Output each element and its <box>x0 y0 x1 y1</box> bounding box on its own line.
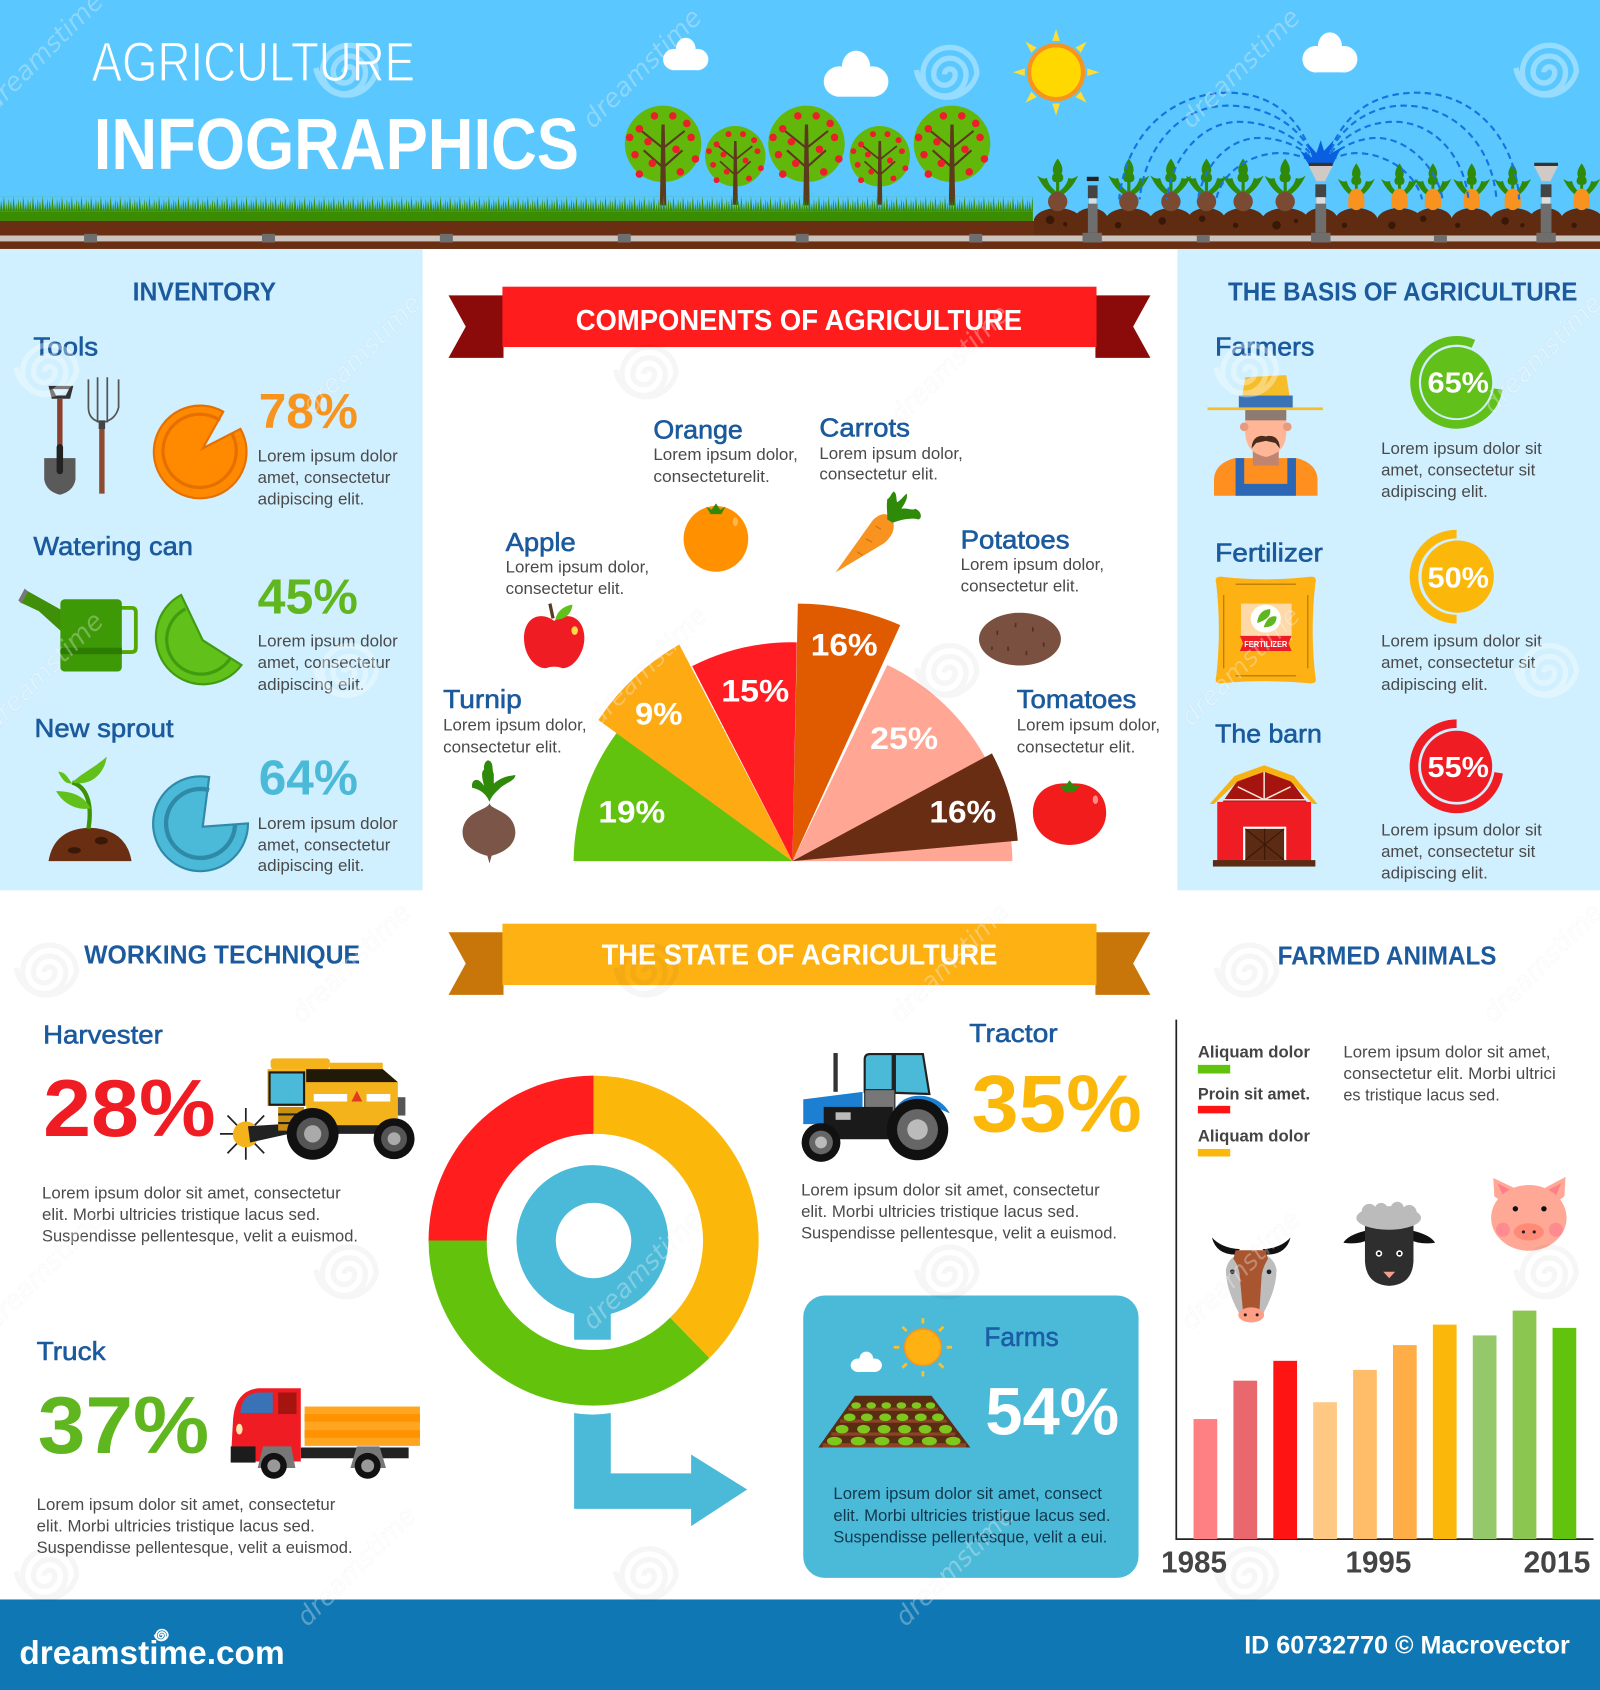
heading: inventory: INVENTORY <box>133 279 276 307</box>
chart: bars <box>1194 1311 1576 1539</box>
value: 28 percent: 28% <box>43 1064 216 1154</box>
text: farmers description: amet, consectetur sit <box>1381 460 1536 479</box>
icon: footer spiral <box>155 1630 168 1641</box>
text: farms description: Suspendisse pellentesque, velit a eui. <box>833 1527 1107 1546</box>
icon: short sprinkler <box>1082 177 1102 243</box>
text: new sprout description: amet, consectetur <box>258 835 391 854</box>
text: harvester description <box>42 1184 358 1246</box>
text: harvester description: Lorem ipsum dolor sit amet, consectetur <box>42 1184 341 1203</box>
soil mounds <box>1034 208 1600 235</box>
panel: basis of agriculture <box>1177 249 1600 890</box>
icon: fertilizer bag: FERTILIZER <box>1244 640 1287 649</box>
text: watering can description: Lorem ipsum dolor <box>258 632 398 651</box>
ring: 50 percent <box>1414 534 1494 619</box>
text: fertilizer description: amet, consectetur sit <box>1381 653 1536 672</box>
text: farmers description: Lorem ipsum dolor sit <box>1381 439 1542 458</box>
text: tractor description: Suspendisse pellentesque, velit a euismod. <box>801 1223 1117 1242</box>
text: barn description: amet, consectetur sit <box>1381 842 1536 861</box>
text: harvester description: elit. Morbi ultricies tristique lacus sed. <box>42 1205 320 1224</box>
watermark text: dreamstime <box>884 299 1015 431</box>
label: carrots: Carrots <box>819 415 910 443</box>
label: truck: Truck <box>37 1338 106 1366</box>
ribbon: components heading: COMPONENTS OF AGRICULTURE <box>576 305 1022 337</box>
watermark text: dreamstime <box>582 601 714 732</box>
title: agriculture: AGRICULTURE <box>92 30 415 93</box>
label: turnip: consectetur elit. <box>443 737 562 756</box>
watermark text: dreamstime <box>1175 3 1307 134</box>
watermark text: dreamstime <box>577 3 708 134</box>
sprinkler water arcs <box>1119 93 1519 199</box>
chart axes <box>1176 1020 1594 1539</box>
text: barn description <box>1381 820 1542 882</box>
chart: year labels: 1985 <box>1161 1547 1227 1580</box>
text: farms description: Lorem ipsum dolor sit amet, consect <box>833 1484 1102 1503</box>
label: potatoes: Potatoes <box>961 527 1070 555</box>
text: farms description: elit. Morbi ultricies tristique lacus sed. <box>833 1506 1111 1525</box>
icon: cow <box>1212 1237 1291 1322</box>
chart: year labels: 2015 <box>1523 1547 1590 1580</box>
label: apple: consectetur elit. <box>506 579 624 598</box>
icon: fertilizer bag <box>1216 577 1316 683</box>
value: 37 percent: 37% <box>38 1381 209 1471</box>
text: tools description <box>258 446 398 508</box>
text: truck description: Lorem ipsum dolor sit amet, consectetur <box>37 1495 336 1514</box>
icon: central blue ring with stem <box>516 1165 668 1340</box>
pie: 78 percent <box>154 406 247 498</box>
ring: 65 percent <box>1415 340 1498 424</box>
text: truck description: Suspendisse pellentesque, velit a euismod. <box>37 1538 353 1557</box>
chart: fan pie <box>574 604 1018 861</box>
legend: Proin sit amet. <box>1198 1084 1310 1103</box>
ring: 55 percent <box>1414 724 1499 809</box>
watermark text: dreamstime <box>286 897 417 1029</box>
text: farmers description: adipiscing elit. <box>1381 482 1488 501</box>
label: tomatoes <box>1017 686 1160 756</box>
icon: carrot <box>836 491 921 572</box>
label: harvester: Harvester <box>43 1021 163 1049</box>
label: tomatoes: Lorem ipsum dolor, <box>1017 716 1160 735</box>
chart: fan pie: 16% <box>929 794 996 829</box>
text: farms description <box>833 1484 1111 1546</box>
icon: turnip <box>463 760 515 863</box>
value: 35 percent: 35% <box>971 1060 1142 1150</box>
label: apple: Apple <box>506 529 576 557</box>
text: tools description: amet, consectetur <box>258 468 391 487</box>
ribbon: state heading: THE STATE OF AGRICULTURE <box>602 940 997 972</box>
panel: components of agriculture <box>443 287 1160 863</box>
label: potatoes <box>961 527 1104 596</box>
heading: working technique: WORKING TECHNIQUE <box>84 942 360 970</box>
text: animals description <box>1343 1042 1556 1104</box>
text: new sprout description: adipiscing elit. <box>258 856 364 875</box>
ring: 65 percent: 65% <box>1427 367 1489 399</box>
icon: turnip and carrot rows <box>1037 158 1600 211</box>
icon: tractor <box>802 1053 950 1162</box>
watermark text: dreamstime <box>889 1501 1021 1632</box>
icon: apple <box>524 603 584 668</box>
text: truck description: elit. Morbi ultricies tristique lacus sed. <box>37 1517 315 1536</box>
legend: Aliquam dolor <box>1198 1126 1310 1145</box>
ribbon: state heading <box>449 924 1150 995</box>
panel: header scene <box>0 0 1600 249</box>
icon: watering can <box>18 588 136 671</box>
panel: inventory <box>0 249 423 890</box>
label: farms: Farms <box>984 1322 1059 1352</box>
text: truck description <box>37 1495 353 1557</box>
value: 78 percent: 78% <box>259 383 358 439</box>
icon: small cloud <box>851 1352 882 1372</box>
label: tools: Tools <box>33 334 98 362</box>
pie: 45 percent <box>156 595 242 684</box>
ring: 50 percent: 50% <box>1427 562 1489 594</box>
icon: sun <box>1013 29 1099 115</box>
ring: 55 percent: 55% <box>1427 752 1489 784</box>
panel: farmed animals <box>1161 943 1594 1580</box>
watermark text: dreamstime <box>296 288 428 420</box>
watermark text: dreamstime <box>291 1501 422 1632</box>
text: tools description: Lorem ipsum dolor <box>258 446 398 465</box>
icon: truck <box>231 1388 420 1479</box>
label: new sprout: New sprout <box>35 715 174 743</box>
text: fertilizer description: adipiscing elit. <box>1381 675 1488 694</box>
text: harvester description: Suspendisse pellentesque, velit a euismod. <box>42 1227 358 1246</box>
icon: active sprinkler <box>1300 140 1341 243</box>
panel: working technique <box>37 942 420 1557</box>
legend: Aliquam dolor <box>1198 1042 1310 1061</box>
ground and buried pipe <box>0 221 1600 249</box>
icon: apple trees <box>625 106 990 205</box>
watermark text: dreamstime <box>1175 601 1307 732</box>
text: tools description: adipiscing elit. <box>258 489 364 508</box>
label: potatoes: Lorem ipsum dolor, <box>961 555 1104 574</box>
label: potatoes: consectetur elit. <box>961 577 1079 596</box>
watermark text: dreamstime <box>577 1205 708 1336</box>
text: watering can description: adipiscing elit. <box>258 675 364 694</box>
icon: fork <box>88 377 119 494</box>
label: orange: Orange <box>653 417 743 445</box>
text: animals description: consectetur elit. Morbi ultrici <box>1343 1064 1556 1083</box>
chart: donut <box>429 1076 759 1406</box>
label: apple <box>506 529 649 598</box>
card: farms <box>803 1296 1139 1578</box>
text: fertilizer description: Lorem ipsum dolor sit <box>1381 632 1542 651</box>
label: tomatoes: Tomatoes <box>1017 686 1136 714</box>
label: tractor: Tractor <box>969 1020 1058 1048</box>
value: 45 percent: 45% <box>258 568 358 624</box>
pie: 64 percent <box>153 776 248 871</box>
panel: state of agriculture <box>429 924 1150 1578</box>
icon: tomato <box>1033 780 1106 845</box>
label: the barn: The barn <box>1215 721 1322 749</box>
arrow: blue bent arrow <box>574 1413 747 1526</box>
icon: clouds <box>663 32 1357 97</box>
watermark text: dreamstime <box>884 897 1015 1029</box>
icon: spade <box>44 386 75 495</box>
title: infographics: INFOGRAPHICS <box>94 105 579 185</box>
heading: basis of agriculture: THE BASIS OF AGRICULTURE <box>1228 279 1577 307</box>
value: 54 percent: 54% <box>985 1376 1119 1450</box>
grass strip <box>0 196 1033 221</box>
heading: farmed animals: FARMED ANIMALS <box>1278 943 1496 971</box>
footer bar <box>0 1599 1600 1690</box>
label: watering can: Watering can <box>33 533 193 561</box>
icon: sheep <box>1343 1202 1435 1286</box>
chart: fan pie: 15% <box>721 674 789 709</box>
text: barn description: adipiscing elit. <box>1381 863 1488 882</box>
label: carrots: consectetur elit. <box>819 465 938 484</box>
text: animals description: Lorem ipsum dolor sit amet, <box>1343 1042 1550 1061</box>
chart: fan pie: 25% <box>870 721 938 756</box>
icon: pig <box>1491 1177 1567 1251</box>
text: farmers description <box>1381 439 1542 501</box>
text: tractor description <box>801 1180 1117 1242</box>
text: watering can description: amet, consectetur <box>258 653 391 672</box>
text: barn description: Lorem ipsum dolor sit <box>1381 820 1542 839</box>
icon: potato <box>979 613 1061 666</box>
label: orange <box>653 417 798 486</box>
text: watering can description <box>258 632 398 694</box>
label: farmers: Farmers <box>1215 334 1314 362</box>
watermark text: dreamstime <box>1175 1205 1307 1336</box>
footer credit: ID 60732770 © Macrovector <box>1244 1632 1570 1659</box>
icon: farmer <box>1208 375 1323 496</box>
label: orange: Lorem ipsum dolor, <box>653 445 798 464</box>
chart: fan pie: 9% <box>635 696 682 731</box>
label: apple: Lorem ipsum dolor, <box>506 557 649 576</box>
label: turnip <box>443 686 587 756</box>
label: turnip: Lorem ipsum dolor, <box>443 716 587 735</box>
text: new sprout description: Lorem ipsum dolor <box>258 814 398 833</box>
ribbon: components heading <box>449 287 1150 358</box>
text: new sprout description <box>258 814 398 875</box>
icon: harvester <box>220 1058 415 1160</box>
label: turnip: Turnip <box>443 686 522 714</box>
icon: sprout <box>49 757 132 861</box>
label: carrots <box>819 415 963 484</box>
chart: fan pie: 16% <box>811 627 878 662</box>
icon: orange <box>684 503 748 572</box>
legend <box>1198 1042 1310 1156</box>
chart: fan pie: 19% <box>598 794 665 829</box>
icon: barn <box>1210 765 1318 867</box>
text: tractor description: Lorem ipsum dolor sit amet, consectetur <box>801 1180 1100 1199</box>
text: fertilizer description <box>1381 632 1542 694</box>
label: orange: consecteturelit. <box>653 467 770 486</box>
chart: year labels <box>1161 1547 1590 1580</box>
footer logo: dreamstime.com <box>19 1635 285 1672</box>
label: carrots: Lorem ipsum dolor, <box>819 444 963 463</box>
label: fertilizer: Fertilizer <box>1215 540 1323 568</box>
icon: small sun <box>894 1318 952 1376</box>
text: tractor description: elit. Morbi ultricies tristique lacus sed. <box>801 1202 1079 1221</box>
label: tomatoes: consectetur elit. <box>1017 737 1135 756</box>
icon: idle sprinkler <box>1534 163 1558 243</box>
chart: year labels: 1995 <box>1346 1547 1411 1580</box>
value: 64 percent: 64% <box>259 749 358 805</box>
text: animals description: es tristique lacus sed. <box>1343 1085 1500 1104</box>
icon: crop field <box>818 1396 970 1447</box>
